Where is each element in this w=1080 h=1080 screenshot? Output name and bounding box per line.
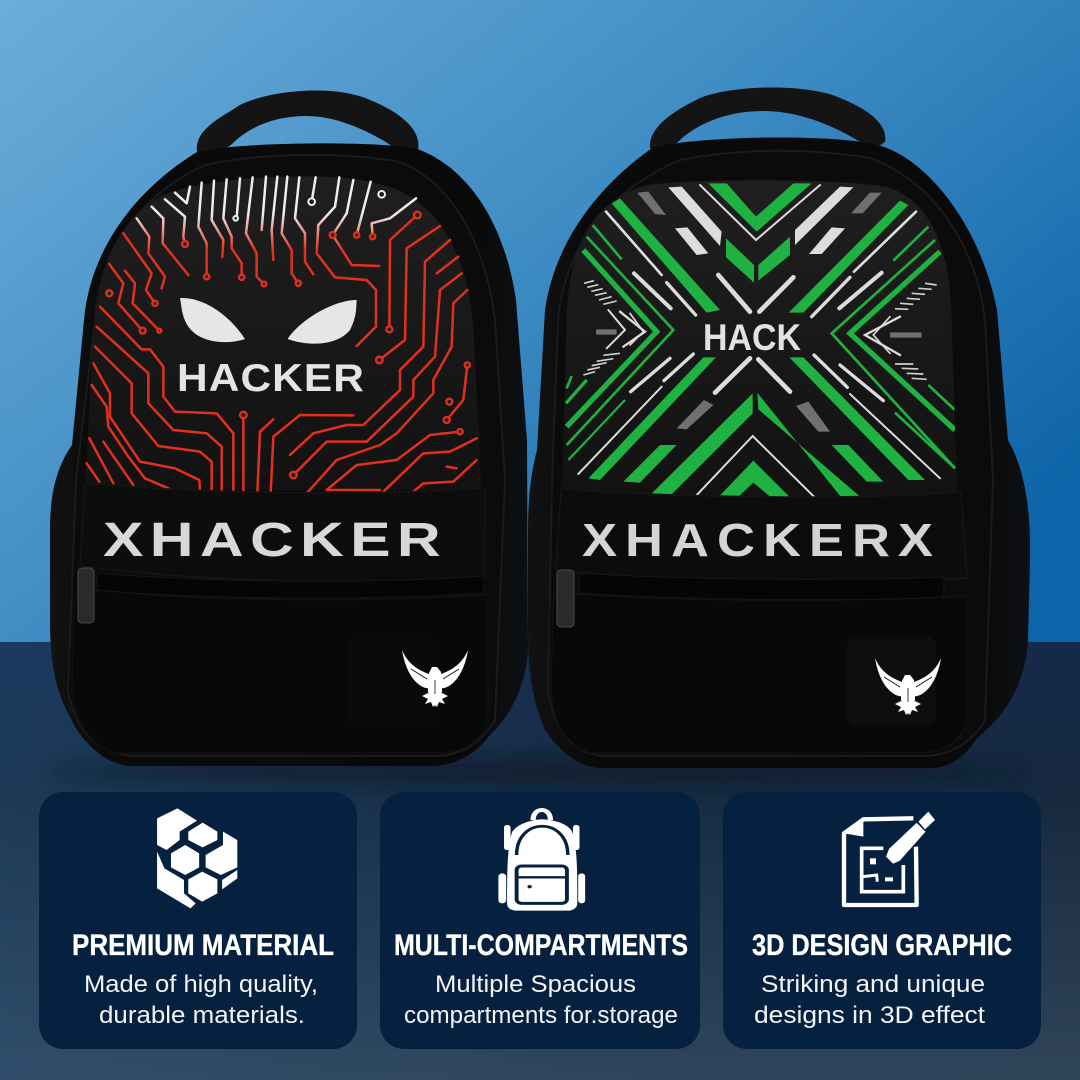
right backpack handle bbox=[650, 88, 885, 152]
right backpack bbox=[528, 88, 1030, 768]
left backpack handle bbox=[197, 91, 418, 155]
body text: Made of high quality, bbox=[84, 971, 318, 998]
panel: premium material bbox=[39, 792, 357, 1049]
icon: white eyes bbox=[180, 298, 357, 344]
left zipper bbox=[78, 568, 484, 623]
HACKER panel word: HACKER bbox=[177, 357, 365, 400]
left eagle logo bbox=[402, 650, 468, 707]
left lower band bbox=[80, 483, 485, 582]
clipped artwork bbox=[566, 183, 955, 501]
side stripes bbox=[583, 281, 937, 379]
body text bbox=[84, 971, 318, 1029]
red circuit traces bbox=[87, 215, 477, 493]
icon: hexagon material bbox=[157, 808, 237, 908]
grey accents bbox=[596, 192, 922, 432]
left backpack bbox=[50, 91, 528, 766]
circuit end nodes bbox=[106, 212, 470, 478]
right backpack body bbox=[528, 137, 1030, 768]
HACK panel word: HACK bbox=[703, 317, 801, 358]
green shapes bbox=[588, 183, 925, 501]
body text: compartments for.storage bbox=[404, 1002, 678, 1029]
background wall bbox=[0, 0, 1080, 642]
right logo patch bbox=[847, 637, 936, 725]
fading top traces bbox=[137, 177, 416, 346]
icon: backpack bbox=[498, 810, 585, 911]
right backpack rim bbox=[548, 151, 993, 756]
right graphic panel: green chevrons bbox=[562, 180, 957, 501]
icon: document and pen bbox=[844, 812, 935, 905]
XHACKERX brand name: XHACKERX bbox=[582, 514, 941, 566]
heading: MULTI-COMPARTMENTS bbox=[394, 929, 688, 962]
left logo patch bbox=[348, 637, 438, 725]
body text bbox=[754, 971, 985, 1029]
left backpack body bbox=[50, 143, 528, 766]
body text bbox=[404, 971, 678, 1029]
body text: Multiple Spacious bbox=[435, 971, 636, 998]
right eagle logo bbox=[875, 658, 941, 715]
left front pocket bbox=[72, 590, 488, 753]
floor shadow bbox=[50, 760, 1030, 784]
heading: 3D DESIGN GRAPHIC bbox=[752, 929, 1012, 962]
body text: durable materials. bbox=[99, 1002, 305, 1029]
body text: designs in 3D effect bbox=[754, 1002, 985, 1029]
right zipper bbox=[557, 570, 944, 627]
XHACKER brand name: XHACKER bbox=[103, 514, 447, 567]
left backpack rim bbox=[68, 155, 505, 756]
right lower band bbox=[556, 489, 967, 582]
body text: Striking and unique bbox=[761, 971, 985, 998]
background floor bbox=[0, 642, 1080, 1080]
white shapes bbox=[668, 187, 853, 255]
panel: 3D design graphic bbox=[723, 792, 1041, 1049]
right front pocket bbox=[551, 594, 968, 753]
left graphic panel: circuit bbox=[85, 176, 482, 493]
heading: PREMIUM MATERIAL bbox=[72, 929, 334, 962]
panel: multi-compartments bbox=[380, 792, 700, 1049]
floor left glow bbox=[0, 642, 1080, 1080]
